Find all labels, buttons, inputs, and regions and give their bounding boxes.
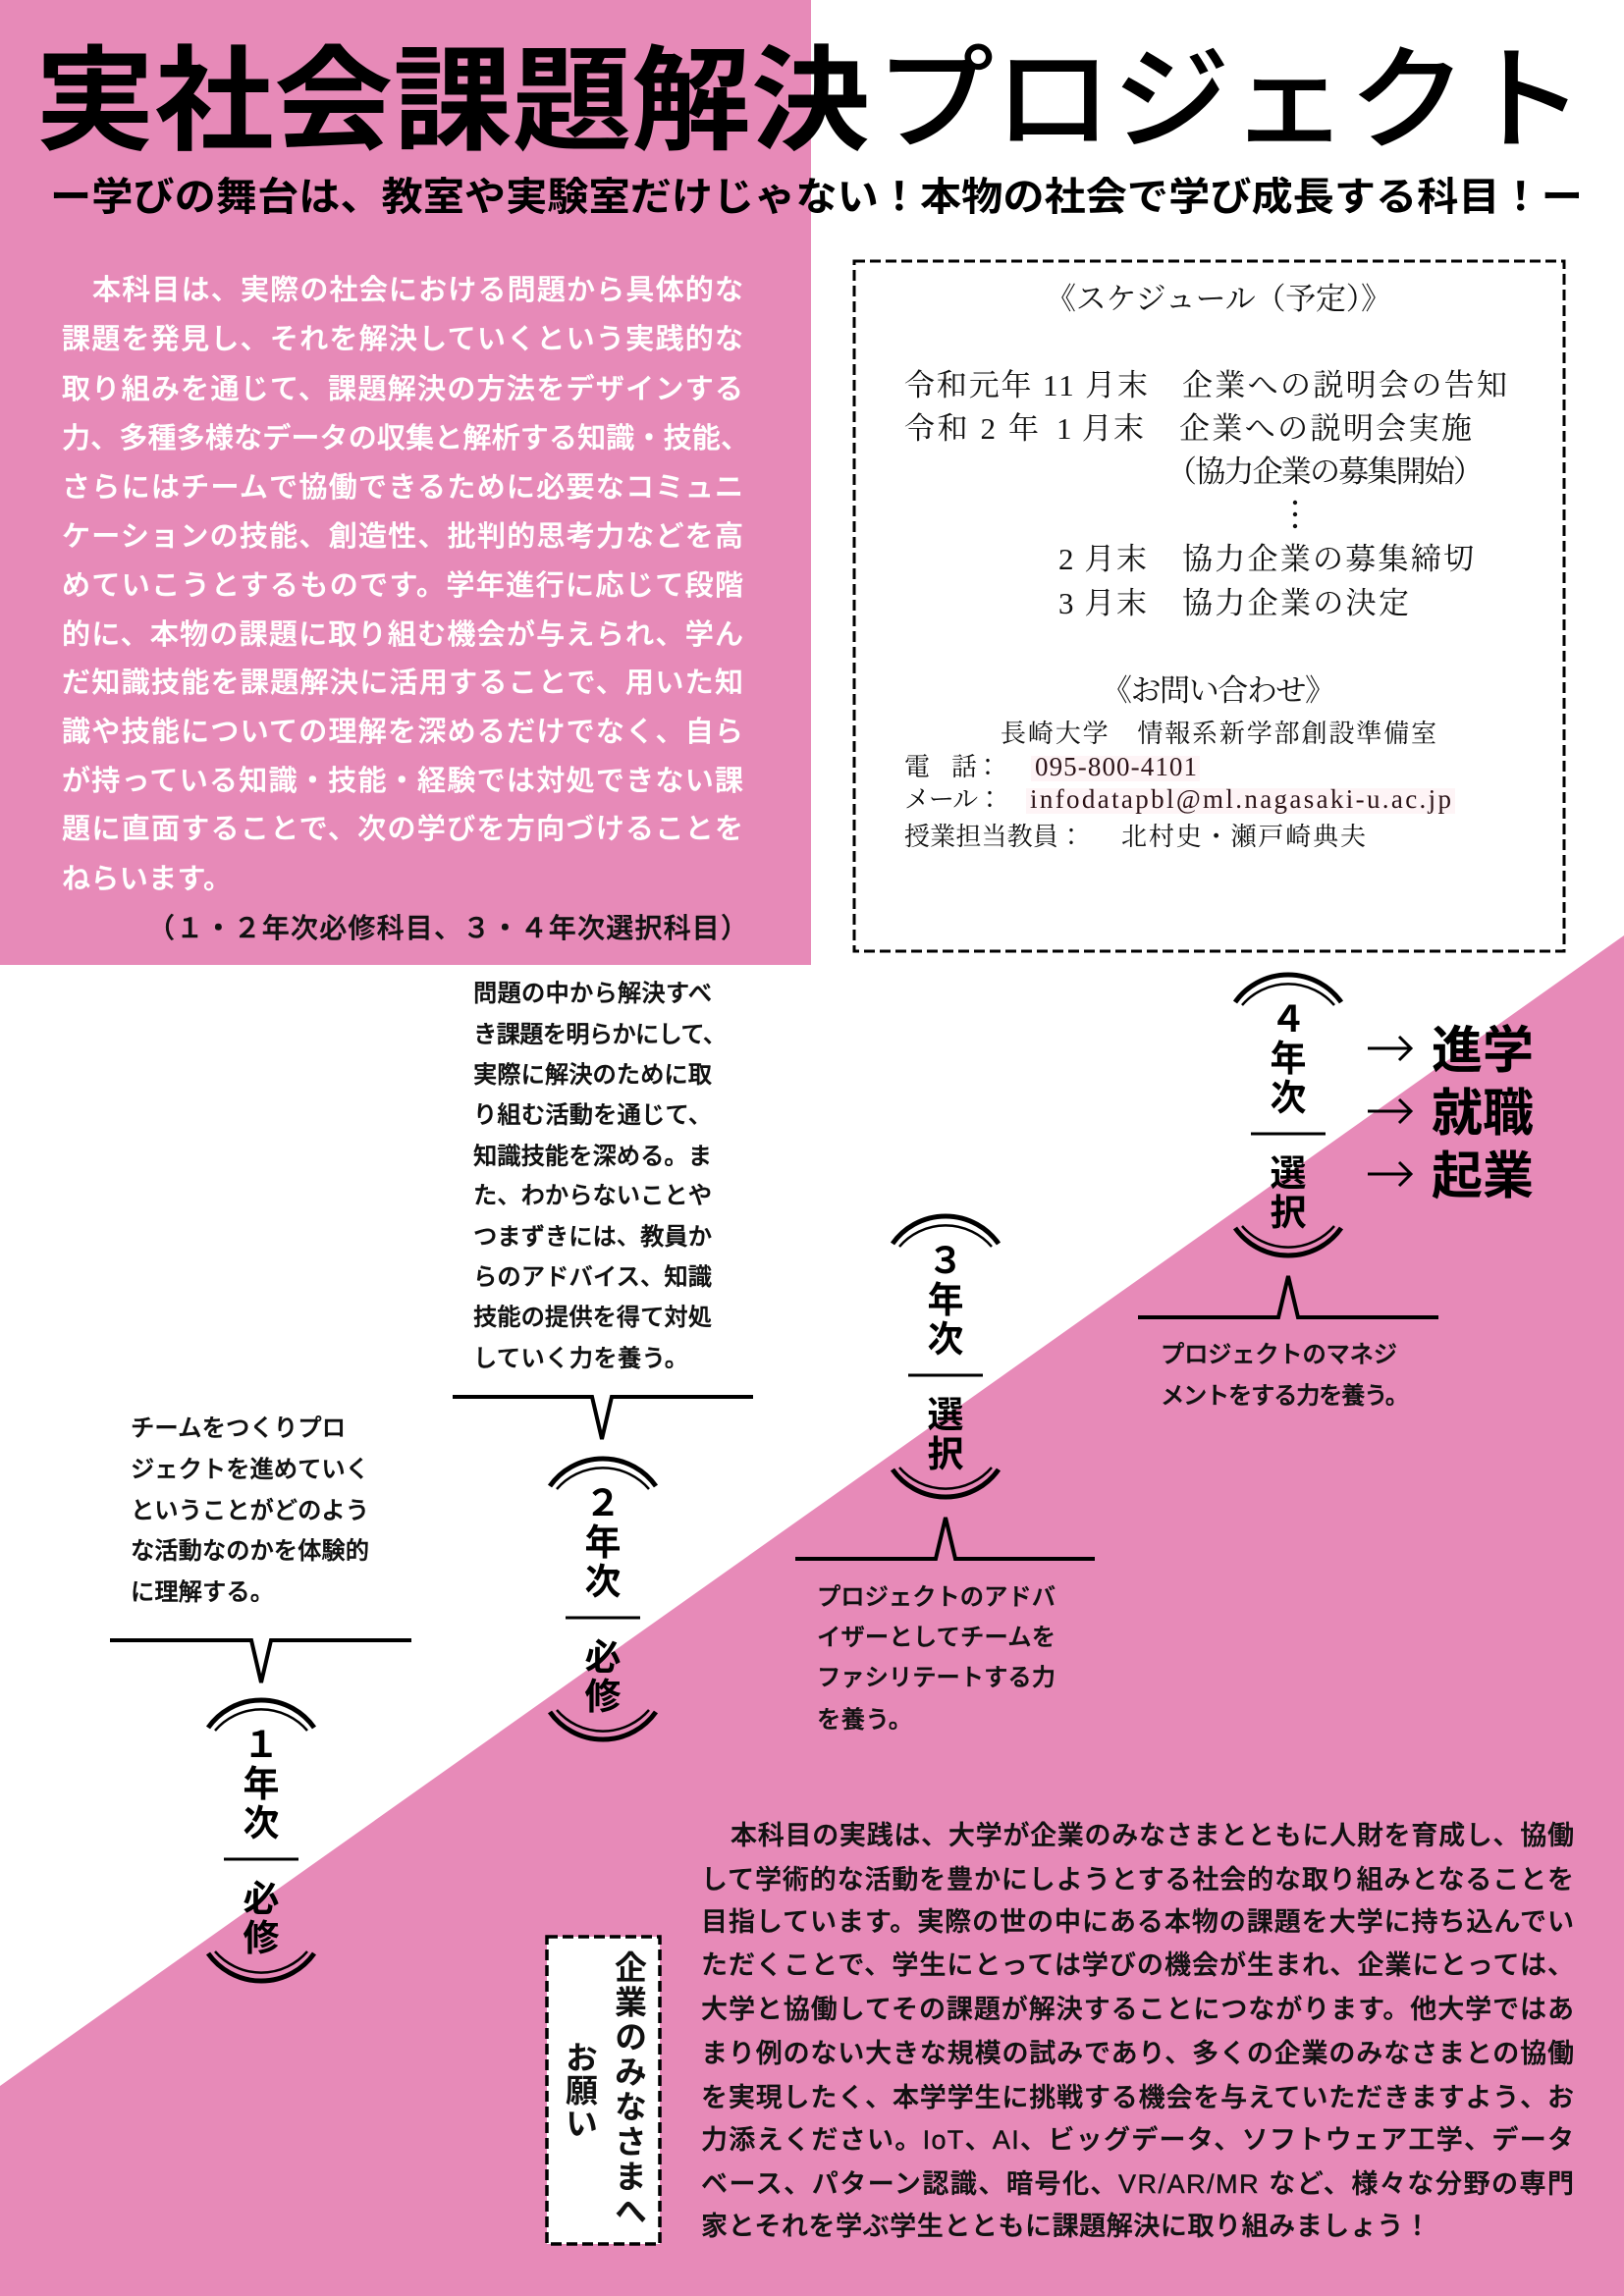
title: プロジェクト [876,8,1585,173]
year 2 badge: 必 [585,1637,621,1678]
text block: course description: 的に、本物の課題に取り組む機会が与えられ、学ん [62,618,743,651]
schedule lines: 1 月末 [1056,411,1144,446]
year 1 description: に理解する。 [131,1579,274,1606]
year 4 description: プロジェクトのマネジ [1161,1342,1397,1368]
schedule lines: 令和元年 11 月末 [904,368,1148,402]
year 3 badge: 択 [927,1434,964,1474]
schedule lines: 協力企業の決定 [1182,586,1409,620]
text block: message body: を実現したく、本学学生に挑戦する機会を与えていただきますよう、お [701,2083,1574,2112]
year 3 description [817,1584,1056,1734]
contact heading: 《お問い合わせ》 [1102,673,1335,708]
schedule lines: 企業への説明会の告知 [1182,368,1507,402]
year 2 badge: 次 [585,1562,621,1602]
background: pink diagonal [0,935,1624,2296]
schedule lines: 2 月末 [1058,542,1147,576]
outcome labels [1432,1023,1534,1205]
title [35,8,1585,173]
year 4 badge [1235,975,1341,1255]
year 3 badge: 選 [927,1395,964,1435]
year 4 badge: 択 [1271,1193,1306,1233]
arrow: to further study [1368,1037,1411,1060]
outcome labels: 起業 [1432,1148,1534,1205]
year 3 badge [893,1216,999,1497]
step: year 1 [110,1415,411,1981]
schedule lines: 協力企業の募集締切 [1182,542,1474,576]
text block: message body: 目指しています。実際の世の中にある本物の課題を大学に持ち込んでい [701,1907,1574,1937]
year 1 badge: 必 [244,1879,279,1919]
contact lines: 北村史・瀬戸崎典夫 [1121,823,1366,851]
title: 実社会課題解決 [35,37,870,165]
year 2 badge: 修 [585,1677,621,1717]
text block: message body: 家とそれを学ぶ学生とともに課題解決に取り組みましょう！ [701,2212,1431,2241]
year 2 description: つまずきには、教員か [473,1224,712,1251]
year 3 description: プロジェクトのアドバ [817,1584,1056,1611]
callout main column: 企業のみなさまへ [611,1950,647,2229]
text block: message body: ベース、パターン認識、暗号化、VR/AR/MR など、様々な分野の専門 [701,2169,1574,2199]
year 2 badge: ２ [585,1483,621,1523]
year 4 description [1161,1342,1409,1410]
text block: message body: ただくことで、学生にとっては学びの機会が生まれ、企業にとっては、 [701,1950,1574,1980]
text block: message body: 力添えください。IoT、AI、ビッグデータ、ソフトウェア工学、データ [701,2125,1574,2155]
background: pink top-left panel [0,0,811,965]
schedule lines: 企業への説明会実施 [1179,411,1472,446]
text block: message body: 大学と協働してその課題が解決することにつながります。他大学ではあ [701,1995,1574,2024]
text block: message body: して学術的な活動を豊かにしようとする社会的な取り組みとなることを [701,1865,1574,1895]
year 1 description: な活動なのかを体験的 [131,1538,369,1565]
year 2 description: き課題を明らかにして、 [473,1022,727,1048]
step: year 2 [453,981,753,1739]
year 1 description: チームをつくりプロ [131,1415,346,1442]
year 2 pointer [453,1397,753,1439]
text: required and elective note: （１・２年次必修科目、３・４年次選択科目） [147,913,748,943]
step: year 4 [1138,975,1438,1410]
year 1 pointer [110,1640,411,1682]
year 4 description: メントをする力を養う。 [1161,1383,1409,1410]
subtitle: ー学びの舞台は、教室や実験室だけじゃない！本物の社会で学び成長する科目！ー [50,176,1583,219]
year 3 description: ファシリテートする力 [817,1665,1056,1691]
text block: course description: 題に直面することで、次の学びを方向づけることを [62,813,743,845]
text block: course description: だ知識技能を課題解決に活用することで、用いた知 [62,667,743,699]
year 2 badge: 年 [585,1522,621,1563]
callout second column: お願い [562,2041,598,2140]
year 2 description: 実際に解決のために取 [473,1062,712,1089]
year 3 badge: 年 [927,1280,964,1320]
year 2 description: 問題の中から解決すべ [473,981,712,1007]
year 4 badge: 年 [1271,1039,1306,1079]
text block: course description: ケーションの技能、創造性、批判的思考力などを高 [62,520,743,553]
year 2 description: 技能の提供を得て対処 [473,1305,712,1331]
year 1 badge: 修 [244,1918,279,1958]
year 3 description: イザーとしてチームを [817,1625,1056,1651]
text block: course description: が持っている知識・技能・経験では対処できない課 [62,765,743,797]
schedule lines: 令和 2 年 [904,411,1039,446]
contact lines [904,720,1455,851]
year 3 description: を養う。 [817,1707,912,1734]
year 4 badge: ４ [1271,999,1306,1040]
year 4 badge: 選 [1271,1153,1306,1194]
text block: course description: 取り組みを通じて、課題解決の方法をデザインする [62,373,743,405]
schedule lines [904,368,1507,620]
arrow: to entrepreneurship [1368,1162,1411,1186]
schedule lines: 3 月末 [1058,586,1147,620]
text block: message body: まり例のない大きな規模の試みであり、多くの企業のみなさまとの協働 [701,2039,1574,2068]
year 4 badge: 次 [1271,1078,1306,1118]
text block: course description: ねらいます。 [62,864,232,895]
year 2 description: らのアドバイス、知識 [473,1264,712,1291]
text block: course description: 課題を発見し、それを解決していくという実践的な [62,323,743,355]
outcome labels: 進学 [1432,1023,1534,1080]
year 1 badge [208,1700,314,1981]
text block: course description: さらにはチームで協働できるために必要なコミュニ [62,471,743,504]
year 1 description: ジェクトを進めていく [131,1457,369,1483]
arrow: to employment [1368,1099,1411,1123]
year 3 badge: 次 [927,1319,964,1360]
text block: course description [62,274,749,895]
year 1 badge: 年 [244,1764,279,1804]
callout: message to companies [547,1937,660,2244]
schedule lines: （協力企業の募集開始） [1166,454,1484,489]
text block: course description: 識や技能についての理解を深めるだけでなく、自ら [62,716,743,748]
text block: course description: 本科目は、実際の社会における問題から具体的な [92,274,743,306]
text block: course description: めていこうとするものです。学年進行に応じて段階 [62,569,743,602]
contact lines: infodatapbl@ml.nagasaki-u.ac.jp [1030,784,1451,814]
year 4 pointer [1138,1276,1438,1317]
contact lines: メール： [904,785,1002,814]
year 2 description: り組む活動を通じて、 [473,1102,712,1129]
career outcomes [1368,1023,1534,1205]
year 2 badge [550,1459,656,1739]
step: year 3 [795,1216,1095,1734]
year 3 pointer [795,1518,1095,1559]
year 2 description: 知識技能を深める。ま [473,1144,712,1170]
outcome labels: 就職 [1432,1086,1534,1143]
year 1 badge: 次 [244,1803,279,1843]
contact lines: 長崎大学 情報系新学部創設準備室 [1001,720,1436,748]
contact lines: 授業担当教員： [904,823,1084,851]
contact lines: 095-800-4101 [1035,752,1197,781]
contact lines: 電 話： [904,753,1001,781]
year 1 badge: １ [244,1725,279,1765]
year 2 description: していく力を養う。 [473,1346,688,1372]
year 1 description [131,1415,369,1606]
text block: course description: 力、多種多様なデータの収集と解析する知識・技能、 [62,422,749,454]
year 1 description: ということがどのよう [131,1498,369,1524]
year 3 badge: ３ [927,1241,964,1281]
text block: message body [701,1821,1574,2241]
text block: message body: 本科目の実践は、大学が企業のみなさまとともに人財を育成し、協働 [731,1821,1574,1850]
panel: schedule and contact [854,261,1564,951]
year 2 description: た、わからないことや [473,1183,712,1209]
year 2 description [473,981,727,1372]
schedule heading: 《スケジュール（予定）》 [1046,282,1391,316]
